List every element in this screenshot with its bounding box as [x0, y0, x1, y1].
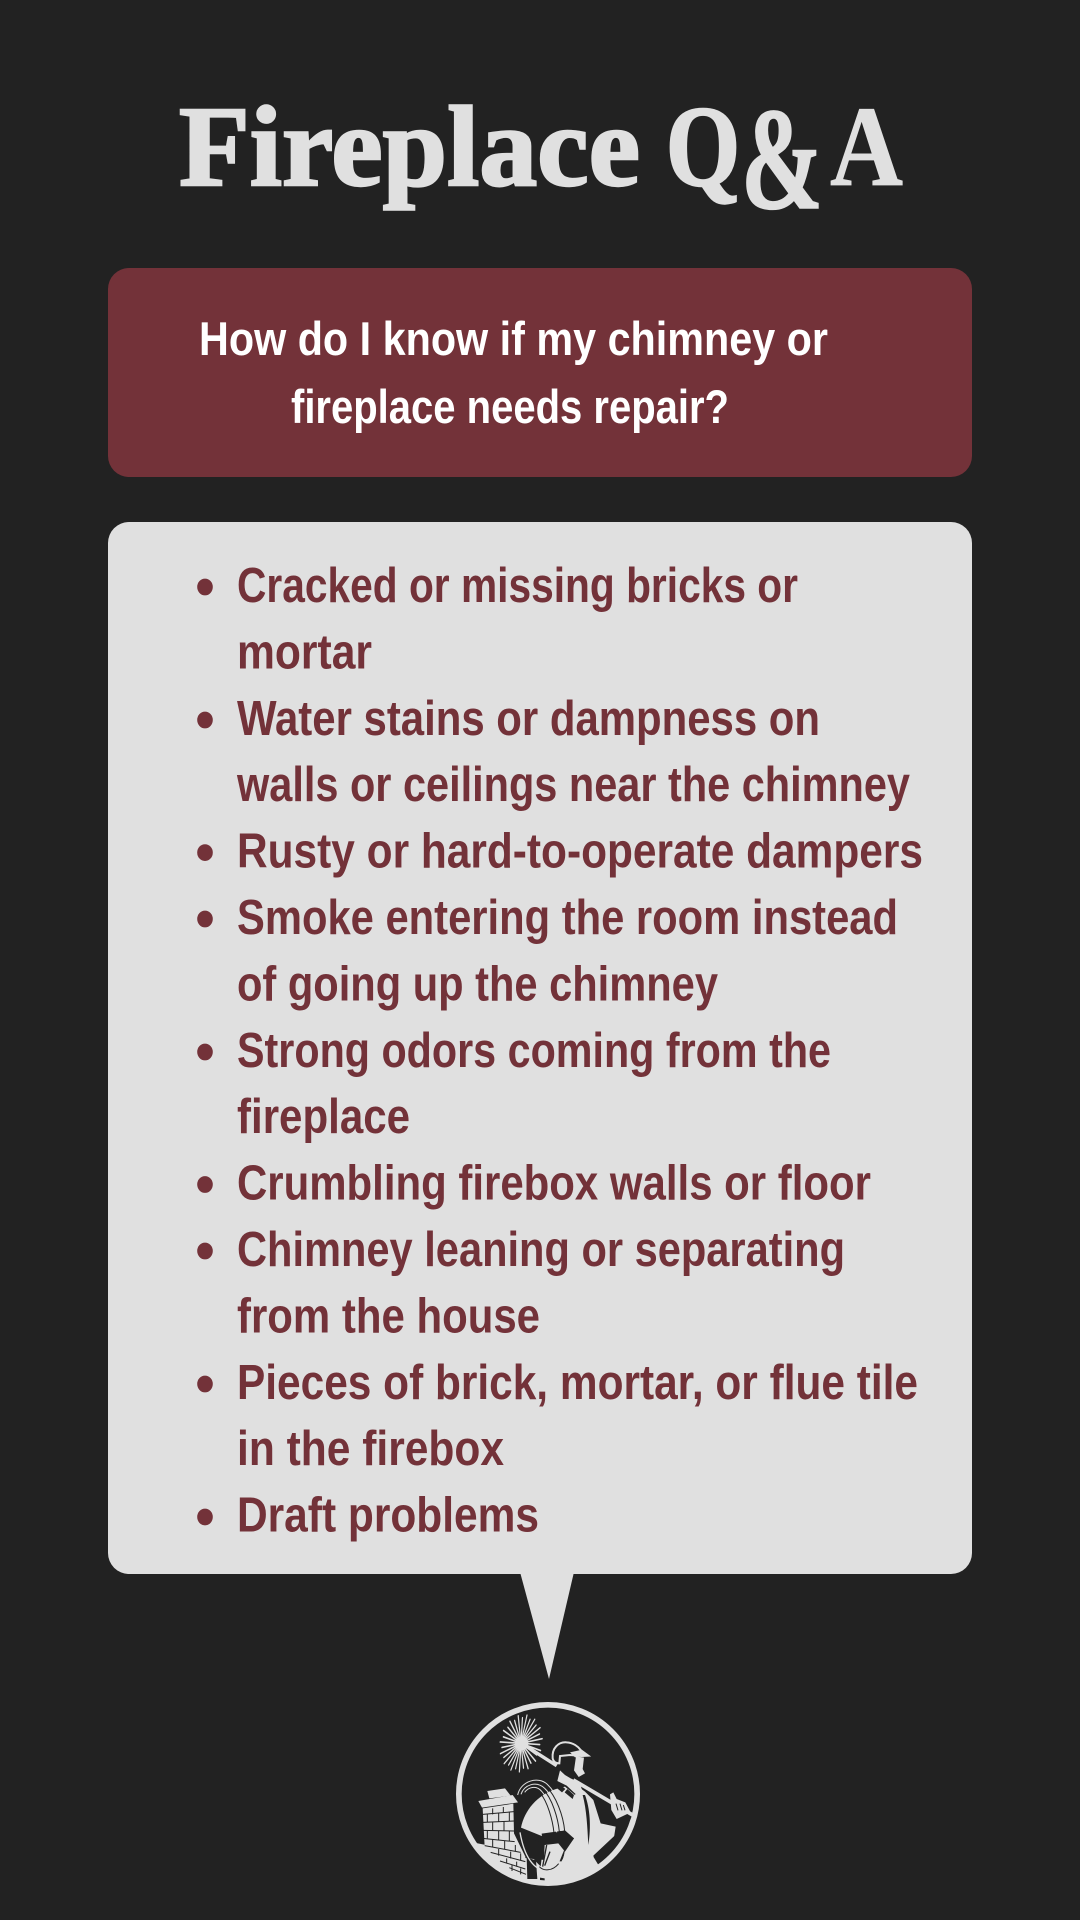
list of repair signs: Water stains or dampness on [237, 692, 820, 746]
list of repair signs: of going up the chimney [237, 957, 718, 1011]
list of repair signs: Cracked or missing bricks or [237, 559, 798, 613]
icon: sweep figure [474, 1742, 632, 1882]
icon: hand on pole [610, 1792, 631, 1819]
list of repair signs: mortar [237, 625, 372, 679]
panel: answer speech bubble [108, 522, 972, 1679]
panel: question [108, 268, 972, 477]
icon: chimney brush [495, 1711, 633, 1815]
icon: coiled rope [518, 1780, 567, 1872]
title: Fireplace [179, 83, 640, 210]
list of repair signs: Chimney leaning or separating [237, 1223, 845, 1277]
question text: How do I know if my chimney or [199, 312, 828, 365]
list of repair signs: Crumbling firebox walls or floor [237, 1157, 871, 1211]
list of repair signs: Draft problems [237, 1489, 539, 1543]
icon: sweep cap and face [553, 1742, 588, 1777]
question text: fireplace needs repair? [291, 380, 729, 433]
question text [199, 312, 828, 433]
list of repair signs: Rusty or hard-to-operate dampers [237, 825, 923, 879]
list of repair signs: walls or ceilings near the chimney [236, 758, 910, 812]
title: A [830, 83, 903, 210]
title: Q [666, 83, 740, 210]
list of repair signs: in the firebox [237, 1422, 504, 1476]
title [179, 78, 903, 240]
list of repair signs: fireplace [237, 1090, 410, 1144]
list of repair signs: Strong odors coming from the [237, 1024, 831, 1078]
list of repair signs: from the house [237, 1289, 540, 1343]
icon: brick chimney [478, 1788, 526, 1878]
list of repair signs [197, 559, 923, 1543]
title: & [741, 78, 823, 240]
list of repair signs: Smoke entering the room instead [237, 891, 898, 945]
list of repair signs: Pieces of brick, mortar, or flue tile [237, 1356, 918, 1410]
icon: chimney sweep logo [459, 1705, 637, 1883]
